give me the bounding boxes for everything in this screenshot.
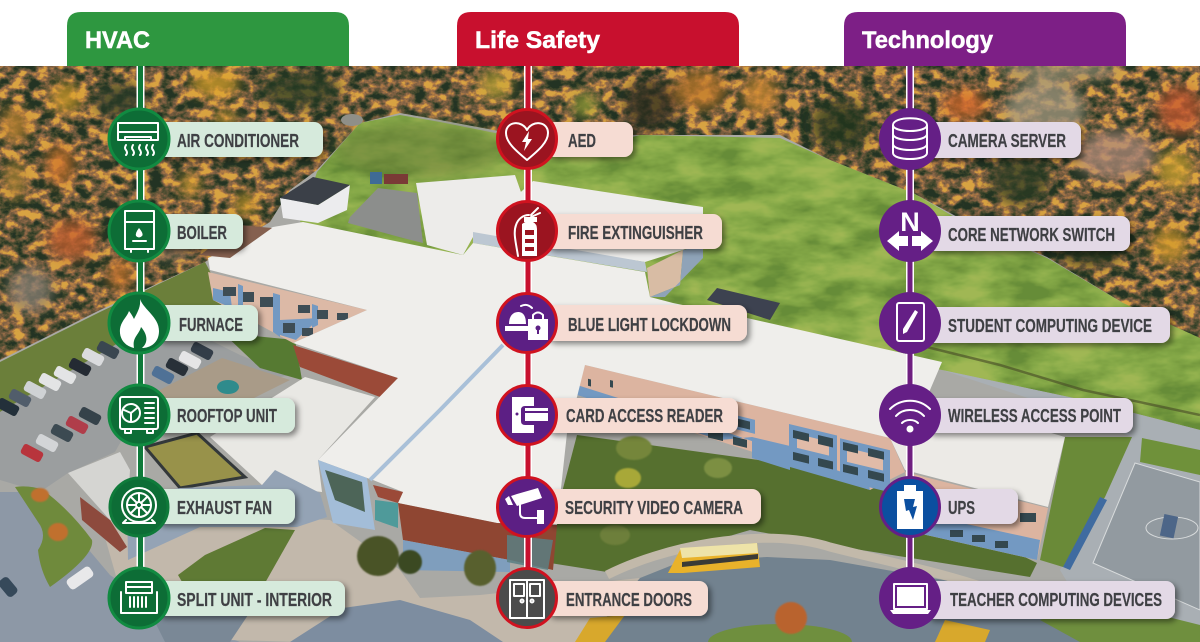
item: wireless access point label (925, 398, 1133, 433)
wall strip under north wing roof (473, 232, 647, 272)
icon: blue light lockdown (498, 294, 556, 352)
wall: west wing (208, 272, 367, 343)
bottom bus loop road (585, 557, 1090, 642)
icon: boiler (109, 201, 169, 261)
item: exhaust fan label: EXHAUST FAN (177, 498, 272, 518)
item: entrance doors label: ENTRANCE DOORS (566, 590, 692, 610)
blue base below brick (403, 540, 510, 572)
lot equipment (370, 172, 408, 184)
item: core network switch label (925, 216, 1130, 251)
item: wireless access point label: WIRELESS ACCESS POINT (948, 406, 1121, 426)
lobby glass (325, 470, 365, 512)
grass strip left of parking (0, 262, 225, 412)
item: security video camera label (545, 489, 761, 524)
icon: rooftop unit (109, 385, 169, 445)
blue side: north wing end (650, 245, 703, 297)
item: exhaust fan label (155, 489, 295, 524)
west wing blue frames (213, 284, 320, 340)
item: security video camera label: SECURITY VIDEO CAMERA (565, 498, 743, 518)
annex roof (280, 177, 350, 205)
item: AED label (545, 122, 633, 157)
roof: north wing left (416, 175, 522, 255)
heading tab: Technology: Technology (862, 27, 994, 54)
panel: HVAC column (67, 12, 349, 628)
item: furnace label: FURNACE (179, 315, 243, 335)
roof: far east wing (890, 397, 1065, 507)
item: boiler label: BOILER (177, 223, 227, 243)
lower left road (0, 492, 240, 642)
courtyard lawn (550, 435, 1037, 577)
wall: north wing end (647, 250, 683, 297)
icon: furnace flame (109, 293, 169, 353)
walkway curve (605, 534, 978, 581)
basketball court (1093, 463, 1200, 610)
item: rooftop unit label (155, 398, 295, 433)
icon: fire extinguisher (498, 202, 556, 260)
item: blue light lockdown label: BLUE LIGHT LOCKDOWN (568, 315, 731, 335)
roof: parapet shading (370, 345, 503, 480)
wall: far east wing (905, 472, 1048, 560)
roof: north wing right (473, 181, 703, 262)
west wing windows (223, 287, 348, 336)
brick wall: upper (293, 345, 398, 397)
item: furnace label (155, 305, 258, 341)
item: teacher computing devices label (925, 581, 1175, 619)
item: air conditioner label: AIR CONDITIONER (177, 131, 299, 151)
darker grass top-left of hill (335, 122, 505, 178)
bottom lawn (708, 624, 852, 642)
panel: Life Safety column (457, 12, 761, 628)
icon: entrance doors (498, 568, 556, 628)
item: camera server label: CAMERA SERVER (948, 131, 1066, 151)
bottom roundabout road (290, 600, 503, 642)
item: student computing device label (925, 307, 1170, 343)
entry glass (507, 535, 553, 570)
icon: security video camera (498, 478, 556, 536)
south-west brick (80, 497, 127, 552)
item: core network switch label: CORE NETWORK SWITCH (948, 225, 1115, 245)
tree with orange leaves (775, 602, 807, 634)
school buses (575, 543, 990, 642)
connector line (524, 66, 532, 596)
item: fire extinguisher label (545, 214, 722, 249)
blue fence (1063, 497, 1107, 570)
icon: air conditioner (109, 109, 169, 169)
icon: core network switch (879, 200, 941, 262)
heading tab: Life Safety: Life Safety (475, 27, 601, 54)
roof: south-west wing (210, 377, 375, 492)
icon: AED heart (498, 110, 556, 168)
playground (159, 358, 290, 398)
annex lot (348, 188, 423, 243)
connector line (136, 66, 144, 596)
parked cars (0, 340, 214, 599)
icon: UPS battery (880, 478, 940, 536)
school building (68, 172, 1065, 572)
bottom right grass (1040, 618, 1200, 642)
item: entrance doors label (545, 581, 708, 616)
item: split unit label (155, 581, 345, 616)
band: east wing blue base (577, 385, 870, 490)
courtyard trees (600, 436, 732, 545)
heading tab: HVAC (67, 12, 349, 66)
south-west grey wall (127, 470, 327, 560)
icon: camera server database (879, 108, 941, 170)
road island (15, 486, 92, 587)
flag lawn (178, 528, 295, 581)
icon: wifi (879, 384, 941, 446)
item: UPS label: UPS (948, 498, 975, 518)
roof: main (208, 222, 942, 525)
south-west building roof (68, 452, 130, 520)
accessible parking and driveway (156, 616, 248, 642)
item: card access reader label: CARD ACCESS READER (566, 406, 723, 426)
icon: core network switch: N (900, 207, 920, 237)
heading tab: Technology (844, 12, 1126, 66)
panel: Technology column (844, 12, 1175, 629)
wall: east wing (577, 365, 905, 490)
parking lot (0, 335, 290, 492)
item: blue light lockdown label (545, 305, 747, 341)
band: far east blue base (924, 524, 1040, 560)
concrete plaza (100, 515, 640, 642)
teal glass (375, 500, 398, 528)
item: card access reader label (545, 398, 738, 433)
icon: student tablet (879, 292, 941, 354)
concrete surround of court (942, 370, 1200, 642)
heading tab: HVAC: HVAC (85, 27, 150, 54)
item: boiler label (155, 214, 243, 249)
right lawn (1040, 437, 1132, 567)
item: rooftop unit label: ROOFTOP UNIT (177, 406, 277, 426)
item: AED label: AED (568, 131, 596, 151)
item: air conditioner label (155, 122, 323, 157)
brown shed (200, 225, 272, 258)
item: UPS label (925, 489, 1018, 524)
item: camera server label (925, 122, 1081, 158)
east wing frames and windows (588, 375, 890, 492)
icon: exhaust fan (110, 478, 168, 536)
trees at entrance (357, 536, 496, 586)
south brick wall (398, 503, 557, 570)
small lawn by parking (232, 336, 302, 380)
heading tab: Life Safety (457, 12, 739, 66)
rubble near hill (341, 114, 363, 126)
hedge line along hill foot (928, 346, 1200, 416)
annex wall (280, 185, 350, 223)
brick above teal glass (373, 485, 403, 503)
icon: laptop (879, 567, 941, 629)
connector line (906, 66, 914, 596)
autumn forest (0, 60, 1200, 360)
item: fire extinguisher label: FIRE EXTINGUISHER (568, 223, 703, 243)
dark shed (707, 288, 780, 320)
lobby wall (318, 460, 375, 530)
icon: split unit (109, 568, 169, 628)
grass hill (300, 115, 1200, 430)
item: split unit label: SPLIT UNIT - INTERIOR (177, 590, 332, 610)
icon: card access reader (498, 386, 556, 444)
corner lawn (1140, 438, 1200, 475)
green roof (145, 433, 245, 488)
east wing blue panel (752, 437, 790, 470)
far east windows (950, 513, 1036, 548)
